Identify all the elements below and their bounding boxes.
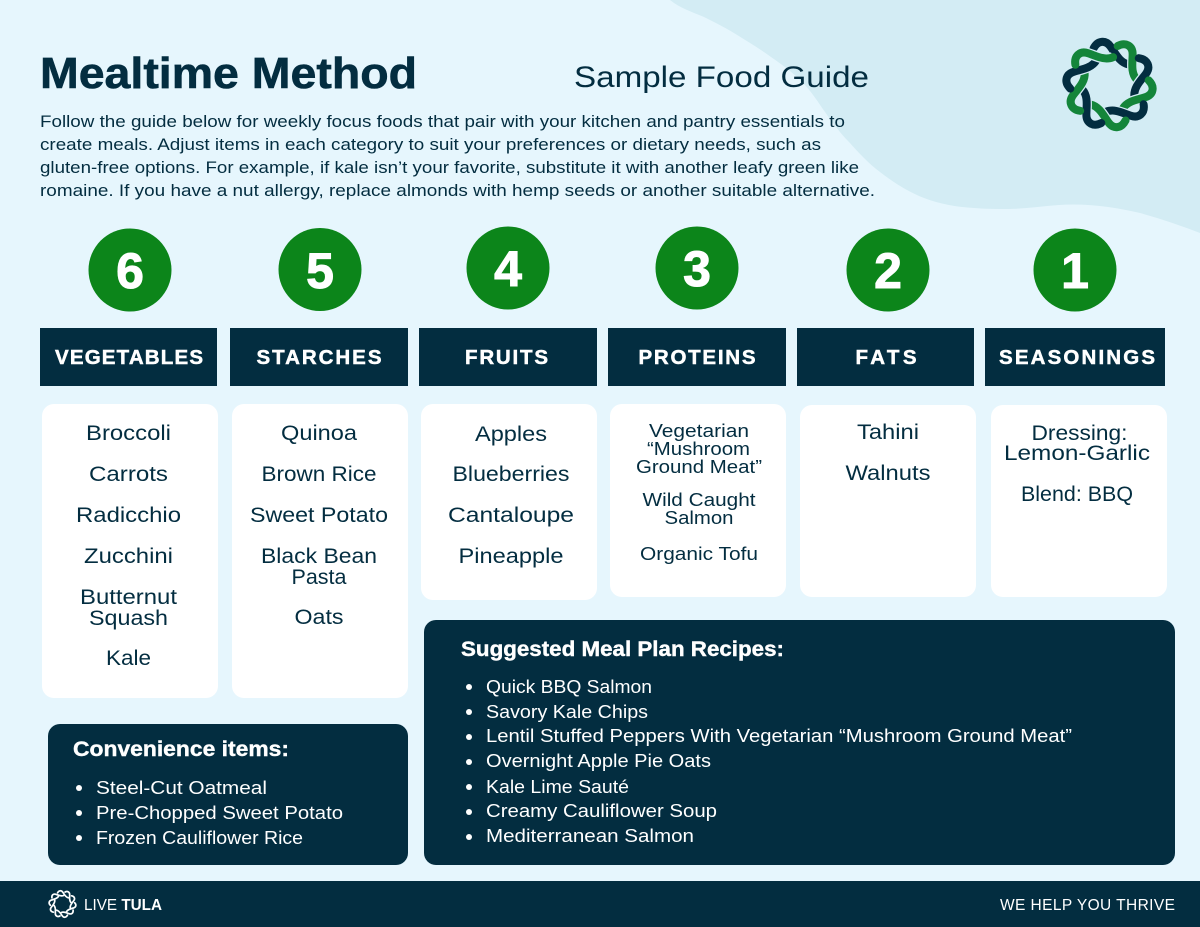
card: seasonings (991, 405, 1167, 597)
panel: convenience items (48, 724, 408, 865)
header: vegetables: VEGETABLES (55, 346, 203, 369)
intro paragraph: create meals. Adjust items in each category to suit your preferences or dietary needs, such as (40, 135, 821, 154)
list: recipes: Creamy Cauliflower Soup (486, 800, 717, 821)
header: seasonings: SEASONINGS (999, 346, 1155, 369)
card: proteins: Vegetarian (649, 420, 749, 441)
list: recipes (466, 676, 1072, 846)
column: proteins (608, 226, 786, 597)
card: proteins (610, 404, 786, 597)
number badge 5 (278, 228, 362, 311)
number badge 4 (466, 226, 550, 310)
intro paragraph: gluten-free options. For example, if kale isn’t your favorite, substitute it with another leafy green like (40, 158, 859, 177)
header: fats (797, 328, 974, 386)
list: convenience items (76, 777, 343, 848)
list: recipes: Quick BBQ Salmon (486, 676, 652, 697)
number badge 3 (656, 226, 738, 310)
header: seasonings (985, 328, 1165, 386)
header: starches (230, 328, 408, 386)
number badge 2 (846, 228, 930, 312)
card: vegetables: Carrots (89, 463, 168, 486)
card: starches: Black Bean (261, 545, 377, 568)
card: proteins: Organic Tofu (640, 543, 758, 564)
icon: footer logo (48, 890, 77, 918)
header: fats: FATS (856, 346, 916, 369)
card: starches: Quinoa (281, 422, 357, 445)
card: vegetables: Broccoli (86, 422, 171, 445)
card: seasonings: Dressing: (1032, 422, 1128, 445)
number badge 6: 6 (116, 243, 144, 299)
heading: suggested recipes: Suggested Meal Plan Recipes: (461, 638, 784, 661)
card: proteins: Wild Caught (642, 489, 756, 510)
title: Mealtime Method (40, 49, 417, 98)
card: vegetables: Zucchini (84, 545, 173, 568)
column: fats (797, 228, 976, 597)
number badge 4: 4 (494, 241, 522, 297)
number badge 6 (88, 228, 172, 312)
number badge 1: 1 (1061, 243, 1089, 299)
card: proteins: Ground Meat” (636, 456, 762, 477)
card: starches: Pasta (292, 566, 347, 589)
card: fats: Walnuts (846, 462, 930, 485)
card: fruits: Pineapple (458, 545, 564, 568)
header: starches: STARCHES (256, 346, 382, 369)
card: fruits: Cantaloupe (448, 504, 574, 527)
card: fruits: Blueberries (452, 463, 570, 486)
list: convenience items: Pre-Chopped Sweet Potato (96, 802, 343, 823)
footer brand name: LIVE TULA (84, 897, 162, 914)
column: vegetables (40, 228, 218, 698)
card: proteins: Salmon (664, 507, 734, 528)
icon: Live Tula logo (1063, 39, 1156, 130)
footer tagline: WE HELP YOU THRIVE (1000, 897, 1175, 914)
list: recipes: Savory Kale Chips (486, 701, 648, 722)
panel: suggested recipes (424, 620, 1175, 865)
card: starches (232, 404, 408, 698)
card: proteins: “Mushroom (647, 438, 750, 459)
card: fruits (421, 404, 597, 600)
card: vegetables: Kale (106, 647, 151, 670)
column: seasonings (985, 228, 1167, 597)
header: proteins (608, 328, 786, 386)
background blob (670, 0, 1200, 233)
card: vegetables: Squash (89, 607, 168, 630)
card: starches: Oats (294, 606, 344, 629)
list: recipes: Lentil Stuffed Peppers With Vegetarian “Mushroom Ground Meat” (486, 725, 1072, 746)
card: vegetables: Radicchio (76, 504, 181, 527)
footer bar (0, 881, 1200, 927)
card: seasonings: Lemon-Garlic (1004, 442, 1150, 465)
card: vegetables (42, 404, 218, 698)
intro paragraph: Follow the guide below for weekly focus foods that pair with your kitchen and pantry essentials to (40, 112, 845, 131)
card: seasonings: Blend: BBQ (1021, 483, 1133, 506)
list: recipes: Mediterranean Salmon (486, 825, 694, 846)
intro paragraph (40, 112, 875, 200)
subtitle: Sample Food Guide (574, 61, 869, 94)
card: starches: Brown Rice (262, 463, 376, 486)
card: fats (800, 405, 976, 597)
number badge 3: 3 (683, 241, 711, 297)
column: fruits (419, 226, 597, 600)
heading: convenience items: Convenience items: (73, 738, 289, 761)
card: fruits: Apples (475, 423, 547, 446)
number badge 5: 5 (306, 243, 334, 299)
column: starches (230, 228, 408, 698)
number badge 1 (1034, 228, 1116, 312)
list: recipes: Overnight Apple Pie Oats (486, 750, 711, 771)
list: convenience items: Steel-Cut Oatmeal (96, 777, 267, 798)
intro paragraph: romaine. If you have a nut allergy, replace almonds with hemp seeds or another suitable alternative. (40, 181, 875, 200)
header: proteins: PROTEINS (638, 346, 756, 369)
list: recipes: Kale Lime Sauté (486, 776, 629, 797)
header: fruits: FRUITS (465, 346, 548, 369)
card: vegetables: Butternut (80, 586, 177, 609)
list: convenience items: Frozen Cauliflower Rice (96, 827, 303, 848)
header: fruits (419, 328, 597, 386)
header: vegetables (40, 328, 217, 386)
card: fats: Tahini (857, 421, 919, 444)
card: starches: Sweet Potato (250, 504, 388, 527)
number badge 2: 2 (874, 243, 902, 299)
